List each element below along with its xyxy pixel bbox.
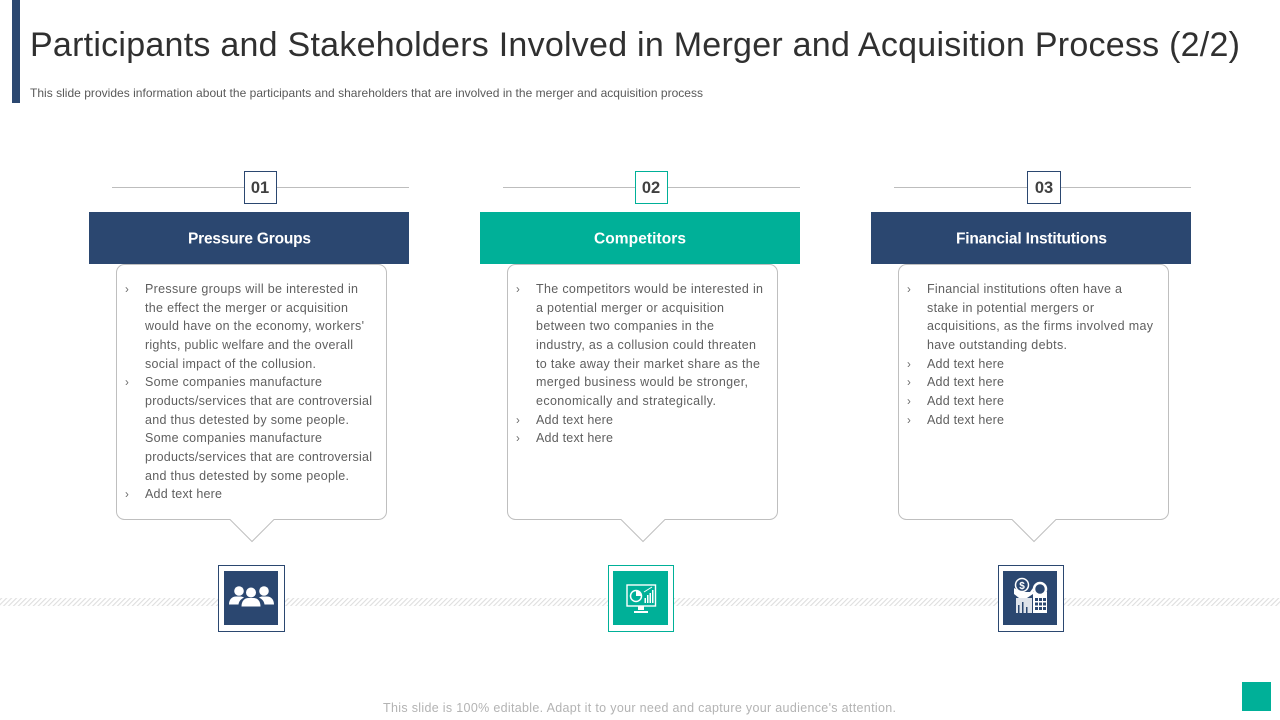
header: competitors: Competitors — [594, 230, 686, 248]
header: financial institutions: Financial Institutions — [956, 230, 1107, 248]
bullet list: rights, public welfare and the overall — [145, 338, 353, 352]
icon: monitor with charts — [608, 566, 674, 632]
accent bar — [12, 0, 20, 103]
header: pressure groups: Pressure Groups — [188, 230, 311, 248]
panel: competitors — [480, 172, 800, 632]
bullet list: The competitors would be interested in — [536, 282, 763, 296]
bullet list: economically and strategically. — [536, 394, 716, 408]
bullet list: › — [125, 377, 129, 389]
bullet list: Add text here — [145, 487, 222, 501]
bullet list: Add text here — [927, 357, 1004, 371]
bullet list: Add text here — [927, 394, 1004, 408]
bullet list: Add text here — [536, 431, 613, 445]
bullet list: and thus detested by some people. — [145, 413, 349, 427]
header: pressure groups — [89, 212, 409, 264]
bullet list: social impact of the collusion. — [145, 357, 316, 371]
panel: pressure groups — [89, 172, 409, 632]
bullet list: and thus detested by some people. — [145, 469, 349, 483]
bullet list: Add text here — [927, 375, 1004, 389]
bullet list — [125, 282, 372, 501]
bullet list: › — [907, 284, 911, 296]
bullet list: Some companies manufacture — [145, 431, 322, 445]
bullet list: Pressure groups will be interested in — [145, 282, 358, 296]
header: competitors — [480, 212, 800, 264]
number rule 03 — [894, 186, 1191, 188]
bullet list: › — [125, 284, 129, 296]
icon: people — [218, 566, 284, 632]
callout box — [508, 264, 778, 542]
bullet list — [907, 282, 1154, 427]
bullet list: Some companies manufacture — [145, 375, 322, 389]
bullet list: › — [907, 359, 911, 371]
number rule 01 — [112, 186, 409, 188]
callout box — [116, 264, 386, 542]
header: financial institutions — [871, 212, 1191, 264]
bullet list: › — [125, 489, 129, 501]
bullet list: a potential merger or acquisition — [536, 301, 724, 315]
number badge 01: 01 — [251, 179, 269, 197]
bullet list: › — [516, 284, 520, 296]
bullet list — [516, 282, 763, 445]
bullet list: Add text here — [536, 413, 613, 427]
bullet list: › — [907, 377, 911, 389]
number badge 03: 03 — [1035, 179, 1053, 197]
bullet list: › — [516, 415, 520, 427]
number badge 03 — [1028, 172, 1060, 204]
corner square — [1242, 682, 1271, 711]
hatched band — [0, 598, 1280, 606]
bullet list: › — [907, 415, 911, 427]
bullet list: the effect the merger or acquisition — [145, 301, 348, 315]
bullet list: Financial institutions often have a — [927, 282, 1122, 296]
icon: finance and calculator — [998, 566, 1064, 632]
bullet list: › — [907, 396, 911, 408]
number badge 02 — [636, 172, 668, 204]
icon: finance and calculator: $ — [1019, 581, 1025, 592]
bullet list: would have on the economy, workers' — [144, 319, 364, 333]
bullet list: products/services that are controversial — [145, 450, 372, 464]
bullet list: stake in potential mergers or — [927, 301, 1094, 315]
title: Participants and Stakeholders Involved in Merger and Acquisition Process (2/2) — [30, 26, 1240, 64]
bullet list: Add text here — [927, 413, 1004, 427]
number rule 02 — [503, 186, 800, 188]
bullet list: › — [516, 433, 520, 445]
number badge 02: 02 — [642, 179, 660, 197]
bullet list: industry, as a collusion could threaten — [536, 338, 756, 352]
number badge 01 — [244, 172, 276, 204]
bullet list: products/services that are controversial — [145, 394, 372, 408]
bullet list: between two companies in the — [536, 319, 714, 333]
footer note: This slide is 100% editable. Adapt it to your need and capture your audience's attention. — [383, 701, 896, 715]
bullet list: have outstanding debts. — [927, 338, 1067, 352]
bullet list: acquisitions, as the firms involved may — [927, 319, 1154, 333]
bullet list: to take away their market share as the — [536, 357, 760, 371]
panel: financial institutions — [871, 172, 1191, 632]
subtitle: This slide provides information about the participants and shareholders that are involved in the merger and acquisition process — [30, 86, 703, 100]
bullet list: merged business would be stronger, — [536, 375, 748, 389]
callout box — [898, 264, 1168, 542]
